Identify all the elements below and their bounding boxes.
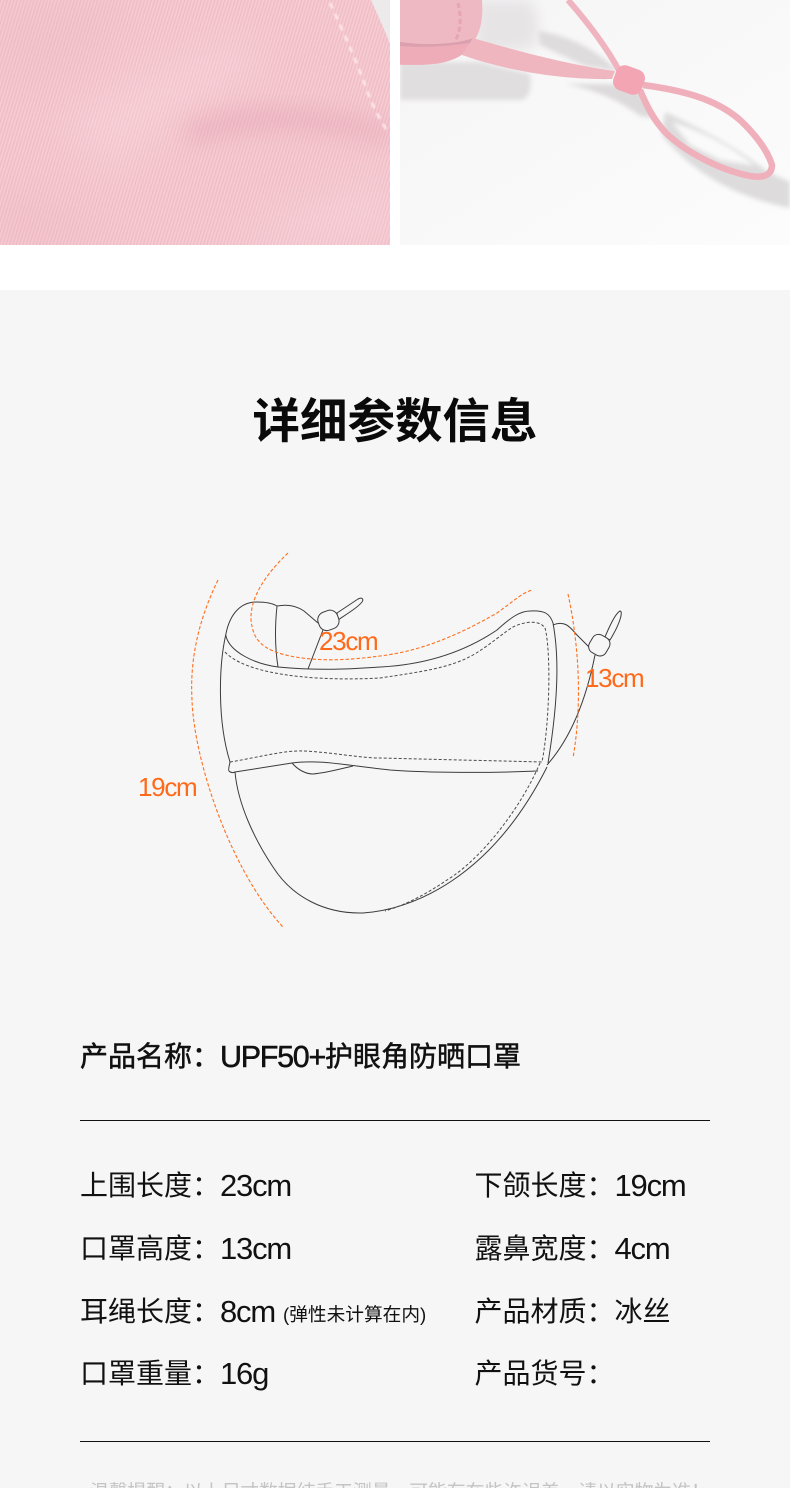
dimension arc: 13cm [568, 594, 578, 758]
spec row: nose width: 露鼻宽度：4cm [474, 1231, 669, 1266]
title: 详细参数信息 [252, 383, 538, 452]
photo: pink fabric close-up [0, 0, 390, 245]
mask outline [220, 602, 595, 913]
seam stitching [225, 622, 549, 911]
dimension arc: 19cm [192, 580, 283, 927]
toggle left [316, 598, 363, 633]
toggle right [586, 611, 621, 659]
spec row: chin length: 下颌长度：19cm [474, 1168, 686, 1203]
product name: 产品名称：UPF50+护眼角防晒口罩 [80, 1040, 521, 1074]
label: 19cm: 19cm [138, 772, 196, 802]
photo: ear strap with toggle [400, 0, 790, 210]
label: 13cm: 13cm [585, 663, 643, 693]
dimension arc: 23cm [251, 553, 532, 660]
spec row: upper length: 上围长度：23cm [80, 1168, 291, 1203]
mask line diagram [138, 552, 643, 927]
spec row: ear strap length: 耳绳长度：8cm (弹性未计算在内) [80, 1294, 426, 1329]
spec row: material: 产品材质：冰丝 [474, 1296, 671, 1327]
spec row: mask weight: 口罩重量：16g [80, 1356, 268, 1391]
label: 23cm: 23cm [319, 626, 377, 656]
spec row: mask height: 口罩高度：13cm [80, 1231, 291, 1266]
spec row: item number: 产品货号： [474, 1358, 615, 1389]
